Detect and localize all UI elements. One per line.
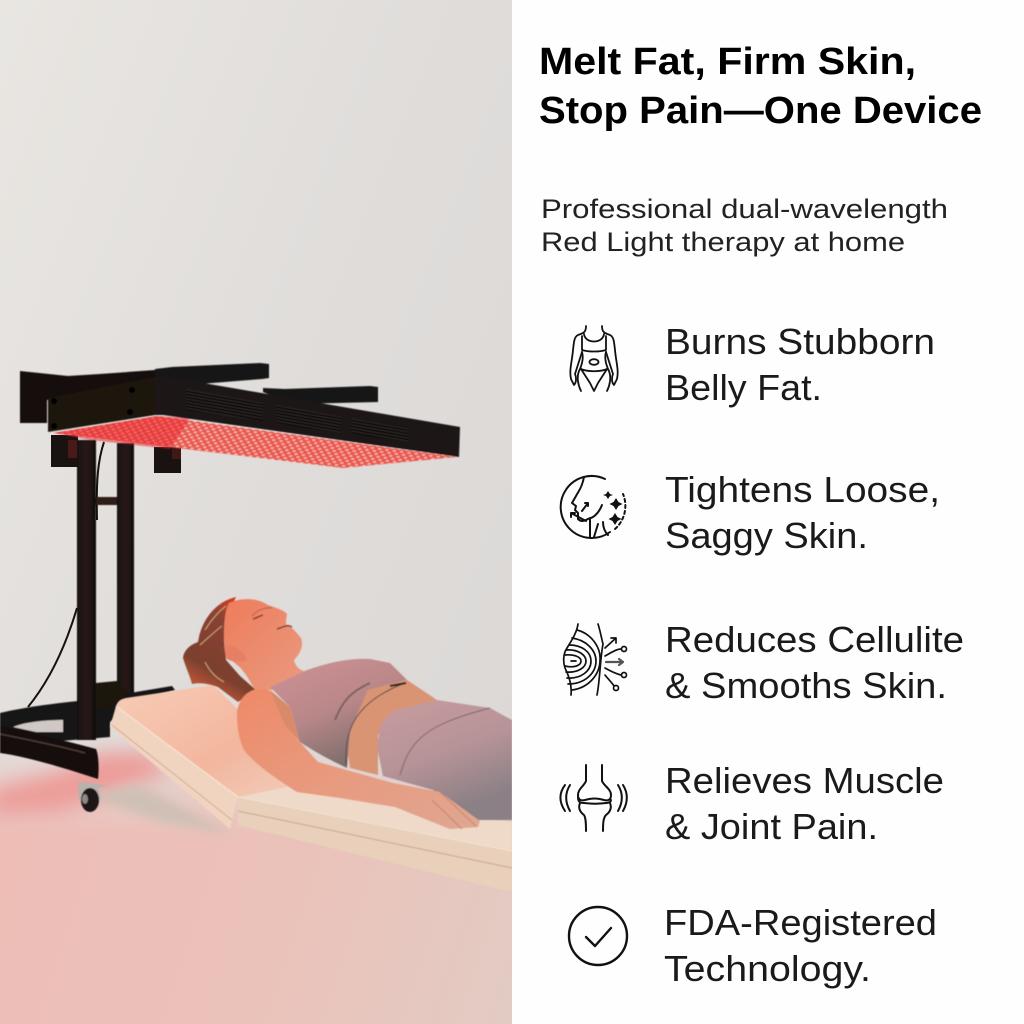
pink lit floor [0,763,512,1024]
studio wall backdrop [0,0,512,814]
benefit text: joint pain: & Joint Pain. [665,806,878,847]
column left [77,440,96,740]
inclined mat section top [116,685,300,797]
benefit text: loose skin [665,469,940,556]
panel: product photo scene [0,0,512,1024]
woman lying under the light [183,597,512,829]
title [539,41,982,132]
icon: cellulite layers with arrows [564,624,626,695]
folding mat [110,685,512,892]
rear handle bars [155,363,269,386]
panel: text column [539,41,982,989]
benefit: FDA registered [569,902,937,989]
column right [117,443,134,693]
icon: check mark circle [569,907,627,965]
wheeled base [0,686,175,741]
head and neck [224,599,310,690]
facial features [252,608,292,629]
sports top [270,659,407,768]
mat shadow on floor [99,784,224,834]
lamp brackets [51,435,181,473]
midriff skin [345,680,437,775]
screws [51,387,135,429]
ear [224,645,247,662]
flat mat section [242,787,512,850]
icon: knee joint with pain waves [560,765,627,831]
icon: female torso [570,326,618,391]
subtitle: Professional dual-wavelength [541,194,948,224]
inclined mat section side [110,706,238,829]
title: Melt Fat, Firm Skin, [539,41,916,83]
benefit text: cellulite: & Smooths Skin. [665,665,947,706]
benefit text: belly fat: Belly Fat. [665,367,822,408]
benefit text: FDA registered [664,902,937,989]
benefit text: loose skin: Tightens Loose, [665,469,940,510]
benefit text: cellulite: Reduces Cellulite [665,619,964,660]
benefit: loose skin [561,469,940,556]
caster wheel [78,782,107,812]
benefit text: FDA registered: FDA-Registered [664,902,937,943]
power cable [28,442,104,707]
panel front side [48,377,155,432]
LED emitting face [53,416,457,468]
arm and hand [237,689,480,829]
subtitle [541,194,948,257]
benefit text: cellulite [665,619,964,706]
vent grilles [186,389,408,442]
lower crossbar [96,681,130,710]
red glow on floor [0,752,170,815]
benefit: joint pain [560,760,944,847]
rear support block [20,370,155,423]
icon: face with lift arrows [561,476,625,538]
subtitle: Red Light therapy at home [541,227,905,257]
benefit text: belly fat: Burns Stubborn [665,321,935,362]
panel long side [155,376,460,457]
stand: base and columns [0,440,175,812]
benefit text: joint pain: Relieves Muscle [665,760,944,801]
benefit: cellulite [564,619,964,706]
title: Stop Pain—One Device [539,90,982,132]
upper crossbar [96,497,117,505]
benefit text: belly fat [665,321,935,408]
leggings [377,700,512,820]
benefit: belly fat [570,321,935,408]
benefit text: joint pain [665,760,944,847]
benefit text: loose skin: Saggy Skin. [665,515,868,556]
red light therapy panel [20,363,460,468]
hair [183,597,256,702]
benefit text: FDA registered: Technology. [664,948,871,989]
